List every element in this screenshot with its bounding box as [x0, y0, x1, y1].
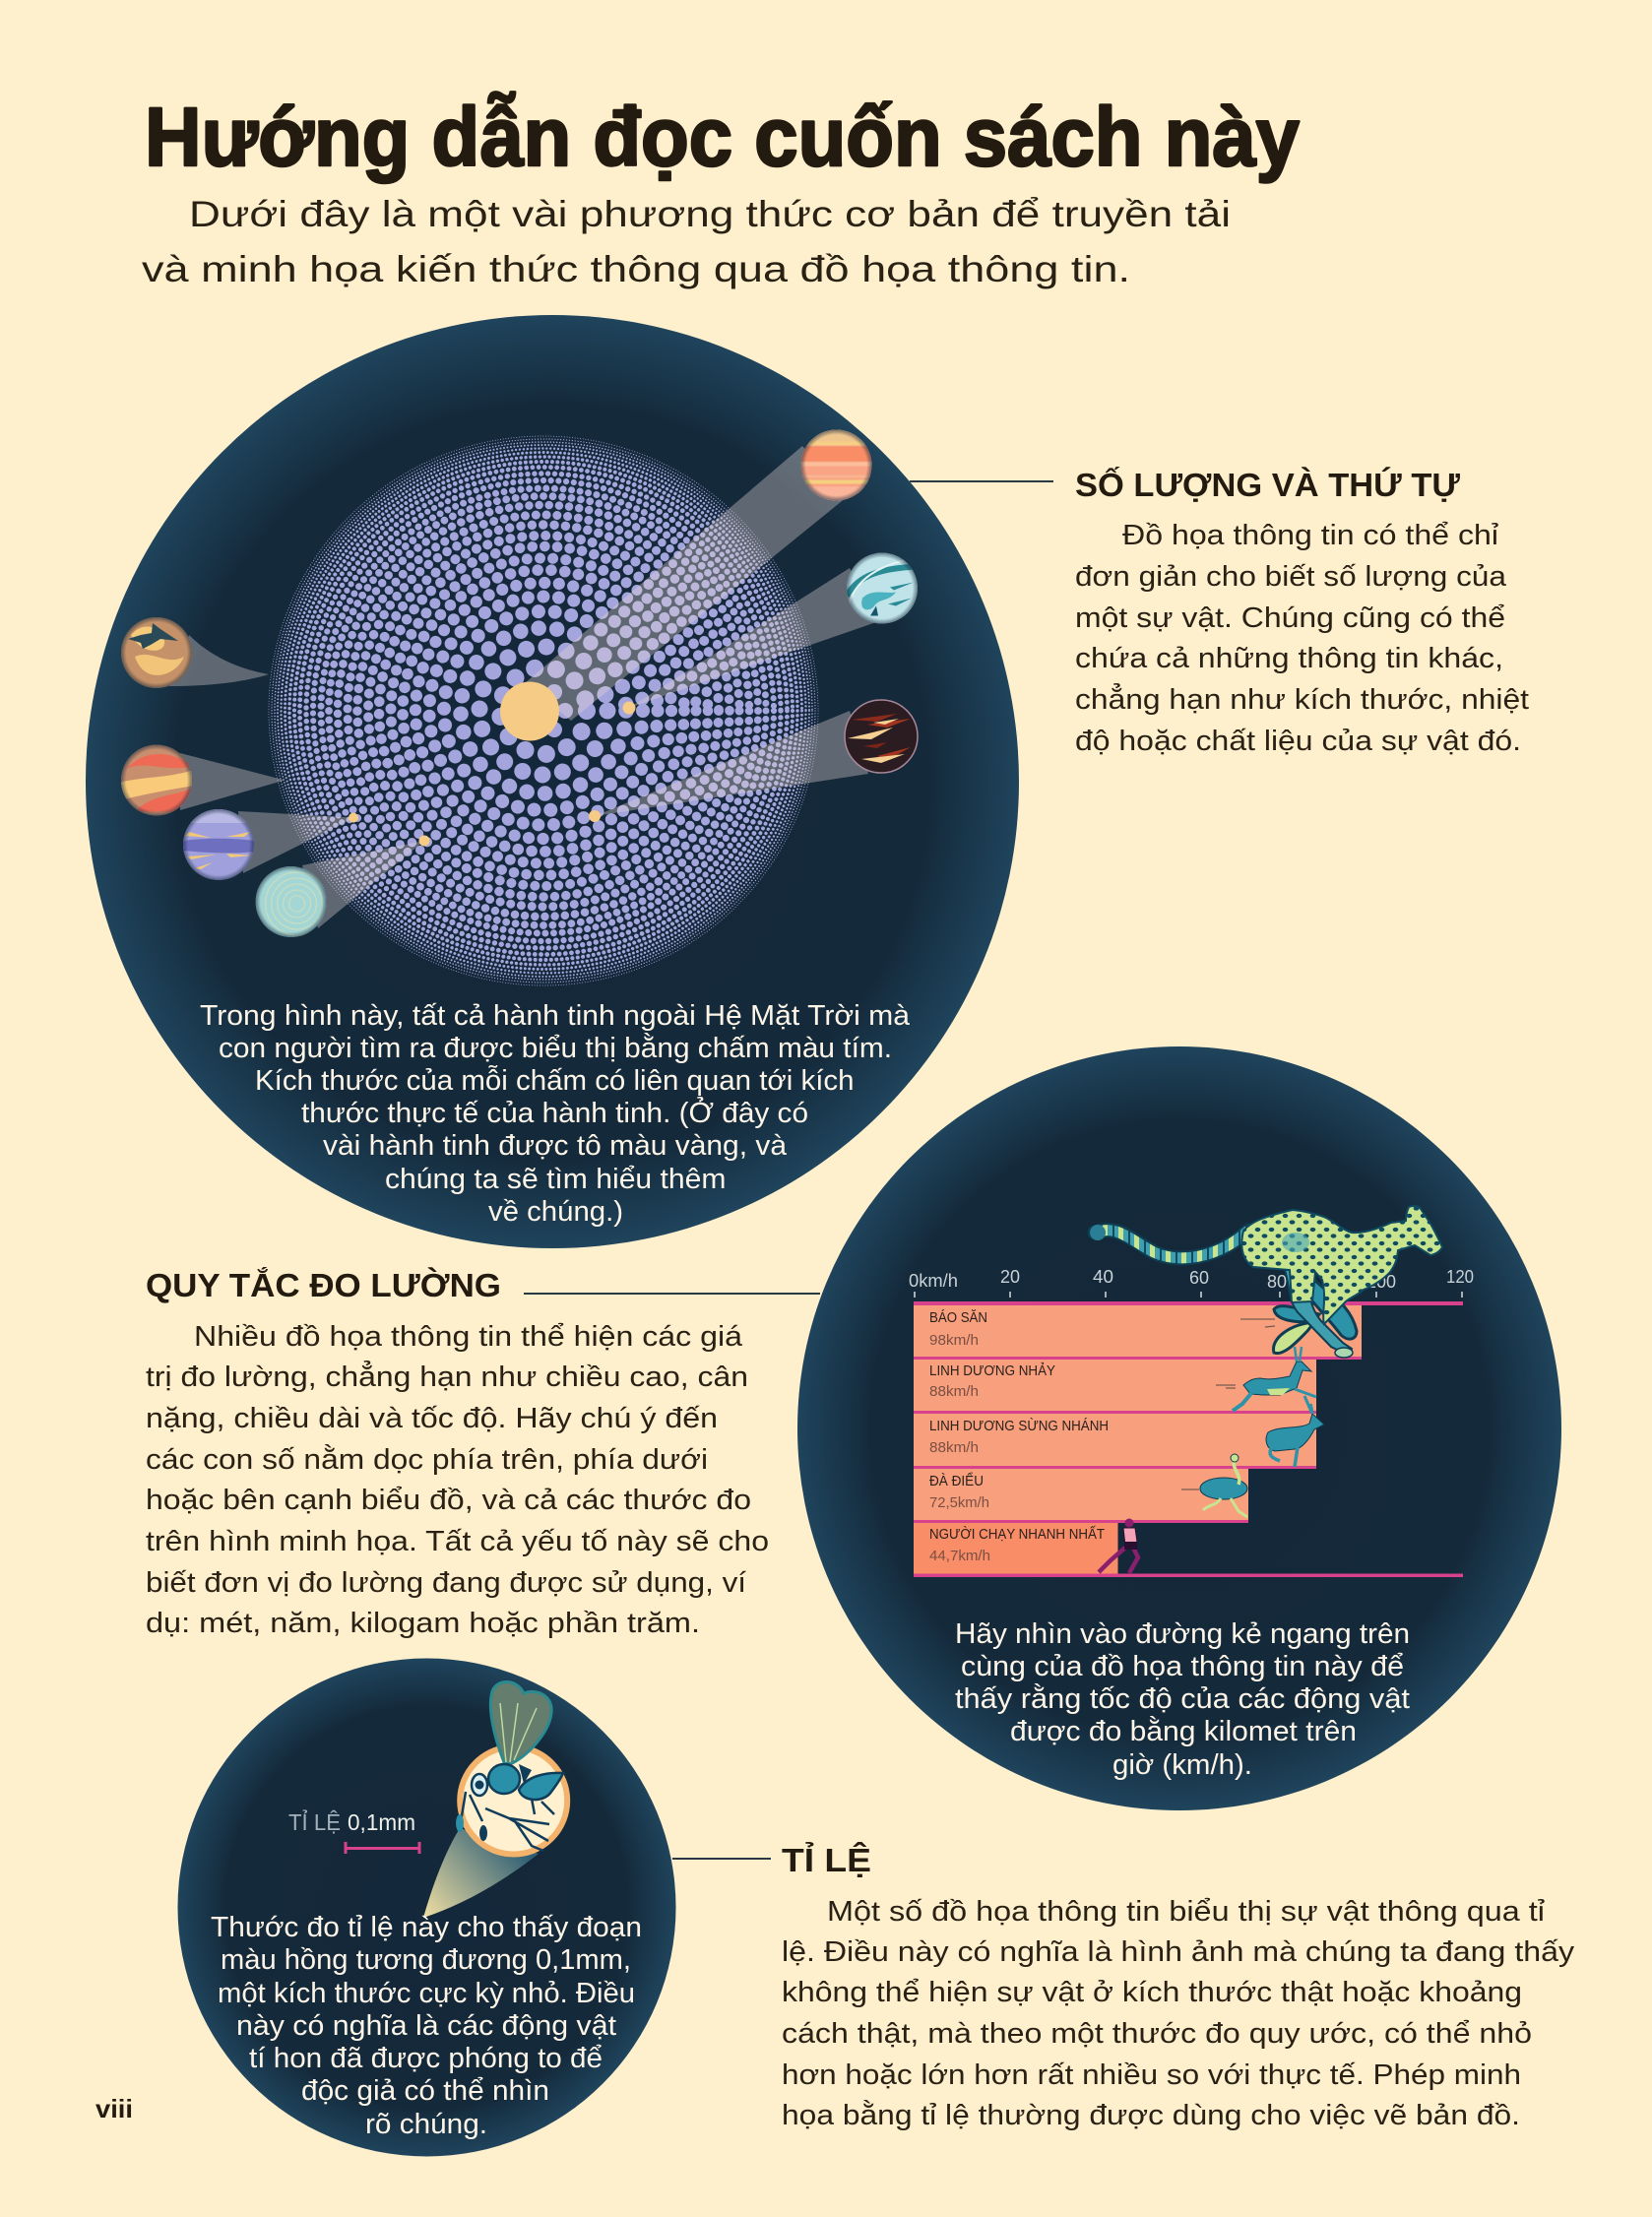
- scale caption: Thước đo tỉ lệ này cho thấy đoạn: [211, 1912, 642, 1943]
- text block: measurement rules: biết đơn vị đo lường đang được sử dụng, ví: [146, 1567, 746, 1599]
- speed chart caption: Hãy nhìn vào đường kẻ ngang trên: [955, 1618, 1410, 1650]
- bar: ostrich: [914, 1469, 1248, 1523]
- panel: speed chart circle: [797, 1046, 1561, 1810]
- bar: pronghorn: LINH DƯƠNG SỪNG NHÁNH: [929, 1418, 1109, 1434]
- text block: quantity and order: một sự vật. Chúng cũng có thể: [1075, 602, 1505, 634]
- title: Hướng dẫn đọc cuốn sách này: [145, 91, 1300, 183]
- icon: sprinter: [1099, 1518, 1138, 1573]
- bar: pronghorn: 88km/h: [929, 1440, 979, 1456]
- connector line: measurement: [524, 1293, 820, 1295]
- planet: dark with fiery streaks: [845, 700, 918, 773]
- scale caption: độc giả có thể nhìn: [301, 2075, 549, 2107]
- speed chart caption: cùng của đồ họa thông tin này để: [961, 1651, 1404, 1682]
- connector line: quantity: [910, 480, 1053, 482]
- text block: measurement rules: nặng, chiều dài và tốc độ. Hãy chú ý đến: [146, 1403, 718, 1434]
- bar: fastest human: 44,7km/h: [929, 1549, 990, 1564]
- icon: springbok: [1216, 1347, 1316, 1412]
- axis labels: 100: [1366, 1272, 1396, 1292]
- exoplanet caption: [200, 1000, 911, 1228]
- text block: quantity and order: chẳng hạn như kích thước, nhiệt: [1075, 682, 1529, 716]
- bar: springbok: [914, 1360, 1316, 1414]
- dot field of exoplanets: [269, 436, 818, 985]
- text block: quantity and order: [1075, 520, 1529, 757]
- text block: quantity and order: Đồ họa thông tin có thể chỉ: [1122, 520, 1499, 551]
- text block: quantity and order: chứa cả những thông tin khác,: [1075, 643, 1503, 674]
- text block: scale: Một số đồ họa thông tin biểu thị sự vật thông qua tỉ: [827, 1896, 1546, 1928]
- bar: ostrich: ĐÀ ĐIỂU: [929, 1472, 984, 1489]
- text block: scale: hơn hoặc lớn hơn rất nhiều so với thực tế. Phép minh: [782, 2059, 1521, 2091]
- subtitle: [142, 194, 1231, 289]
- speed chart caption: thấy rằng tốc độ của các động vật: [955, 1682, 1410, 1715]
- bar: fastest human: NGƯỜI CHẠY NHANH NHẤT: [929, 1526, 1105, 1543]
- scale caption: [211, 1912, 642, 2140]
- axis labels: 120: [1446, 1267, 1474, 1287]
- bar: cheetah: [914, 1302, 1362, 1360]
- heading: measurement rules: QUY TẮC ĐO LƯỜNG: [146, 1267, 501, 1303]
- text block: scale: họa bằng tỉ lệ thường được dùng cho việc vẽ bản đồ.: [782, 2099, 1520, 2131]
- scale caption: tí hon đã được phóng to để: [249, 2043, 603, 2074]
- bar: cheetah: BÁO SĂN: [929, 1309, 987, 1326]
- text block: scale: cách thật, mà theo một thước đo quy ước, có thể nhỏ: [782, 2018, 1532, 2050]
- axis labels: 40: [1093, 1267, 1113, 1287]
- planet: orange banded: [801, 429, 872, 500]
- text block: measurement rules: [146, 1321, 769, 1639]
- bar: cheetah: 98km/h: [929, 1333, 979, 1349]
- bar: springbok: LINH DƯƠNG NHẢY: [929, 1362, 1055, 1379]
- connector line: scale: [672, 1858, 771, 1860]
- exoplanet caption: thước thực tế của hành tinh. (Ở đây có: [301, 1096, 808, 1129]
- axis labels: 0km/h: [909, 1271, 958, 1291]
- subtitle: Dưới đây là một vài phương thức cơ bản để truyền tải: [189, 194, 1231, 234]
- scale bar: [346, 1842, 419, 1854]
- planet: teal swirled: [847, 553, 918, 624]
- heading: scale: TỈ LỆ: [782, 1842, 871, 1878]
- panel: scale circle: [177, 1658, 675, 2156]
- text block: measurement rules: các con số nằm dọc phía trên, phía dưới: [146, 1443, 708, 1476]
- speed chart caption: [955, 1618, 1410, 1781]
- text block: measurement rules: hoặc bên cạnh biểu đồ, và cả các thước đo: [146, 1485, 751, 1516]
- text block: quantity and order: đơn giản cho biết số lượng của: [1075, 561, 1507, 593]
- bar: springbok: 88km/h: [929, 1384, 979, 1400]
- exoplanet caption: chúng ta sẽ tìm hiểu thêm: [385, 1164, 727, 1195]
- text block: measurement rules: dụ: mét, năm, kilogam hoặc phần trăm.: [146, 1608, 700, 1639]
- exoplanet caption: con người tìm ra được biểu thị bằng chấm màu tím.: [219, 1032, 892, 1064]
- scale caption: màu hồng tương đương 0,1mm,: [221, 1944, 631, 1976]
- planet: purple banded: [183, 809, 254, 880]
- page number: viii: [95, 2094, 133, 2123]
- magnifier lens: [460, 1746, 567, 1855]
- planet: red and yellow marbled: [121, 744, 192, 815]
- icon: cheetah: [1090, 1206, 1442, 1358]
- axis labels: [909, 1267, 1474, 1292]
- panel: exoplanets circle: [86, 315, 1019, 1248]
- planet: brown with yellow blotches: [121, 617, 192, 688]
- speed chart caption: giờ (km/h).: [1112, 1749, 1252, 1781]
- beams linking dots to planets: [169, 446, 876, 928]
- bar: ostrich: 72,5km/h: [929, 1495, 989, 1511]
- top and bottom axis rules: [914, 1301, 1463, 1577]
- text block: scale: lệ. Điều này có nghĩa là hình ảnh mà chúng ta đang thấy: [782, 1936, 1575, 1968]
- text block: scale: [782, 1896, 1575, 2131]
- scale caption: rõ chúng.: [365, 2109, 487, 2140]
- scale caption: một kích thước cực kỳ nhỏ. Điều: [218, 1978, 635, 2009]
- bar: fastest human: [914, 1523, 1118, 1575]
- exoplanet caption: về chúng.): [488, 1196, 623, 1228]
- icon: fairy wasp: [456, 1681, 563, 1851]
- text block: measurement rules: Nhiều đồ họa thông tin thể hiện các giá: [194, 1321, 743, 1353]
- text block: quantity and order: độ hoặc chất liệu của sự vật đó.: [1075, 726, 1521, 757]
- bar: pronghorn: [914, 1414, 1316, 1469]
- scale label: [288, 1807, 415, 1835]
- icon: pronghorn: [1266, 1404, 1324, 1467]
- magnifier cone: [423, 1828, 539, 1918]
- speed chart caption: được đo bằng kilomet trên: [1010, 1715, 1357, 1747]
- scale caption: này có nghĩa là các động vật: [236, 2010, 616, 2042]
- text block: measurement rules: trị đo lường, chẳng hạn như chiều cao, cân: [146, 1360, 748, 1393]
- axis labels: 80: [1267, 1272, 1287, 1292]
- scale label: 0,1mm: [348, 1809, 415, 1835]
- axis labels: 60: [1189, 1268, 1209, 1288]
- axis ticks: [915, 1292, 1462, 1298]
- icon: ostrich: [1181, 1454, 1247, 1517]
- heading: quantity and order: SỐ LƯỢNG VÀ THỨ TỰ: [1075, 466, 1461, 503]
- exoplanet caption: Trong hình này, tất cả hành tinh ngoài Hệ Mặt Trời mà: [200, 1000, 911, 1032]
- exoplanet caption: vài hành tinh được tô màu vàng, và: [323, 1130, 788, 1162]
- axis labels: 20: [1000, 1267, 1020, 1287]
- text block: scale: không thể hiện sự vật ở kích thước thật hoặc khoảng: [782, 1977, 1522, 2008]
- planet: pale teal swirl: [256, 866, 329, 937]
- sun and highlighted yellow dots: [349, 681, 636, 847]
- subtitle: và minh họa kiến thức thông qua đồ họa thông tin.: [142, 249, 1130, 289]
- scale label: TỈ LỆ: [288, 1807, 341, 1835]
- exoplanet caption: Kích thước của mỗi chấm có liên quan tới kích: [255, 1064, 855, 1097]
- text block: measurement rules: trên hình minh họa. Tất cả yếu tố này sẽ cho: [146, 1526, 769, 1557]
